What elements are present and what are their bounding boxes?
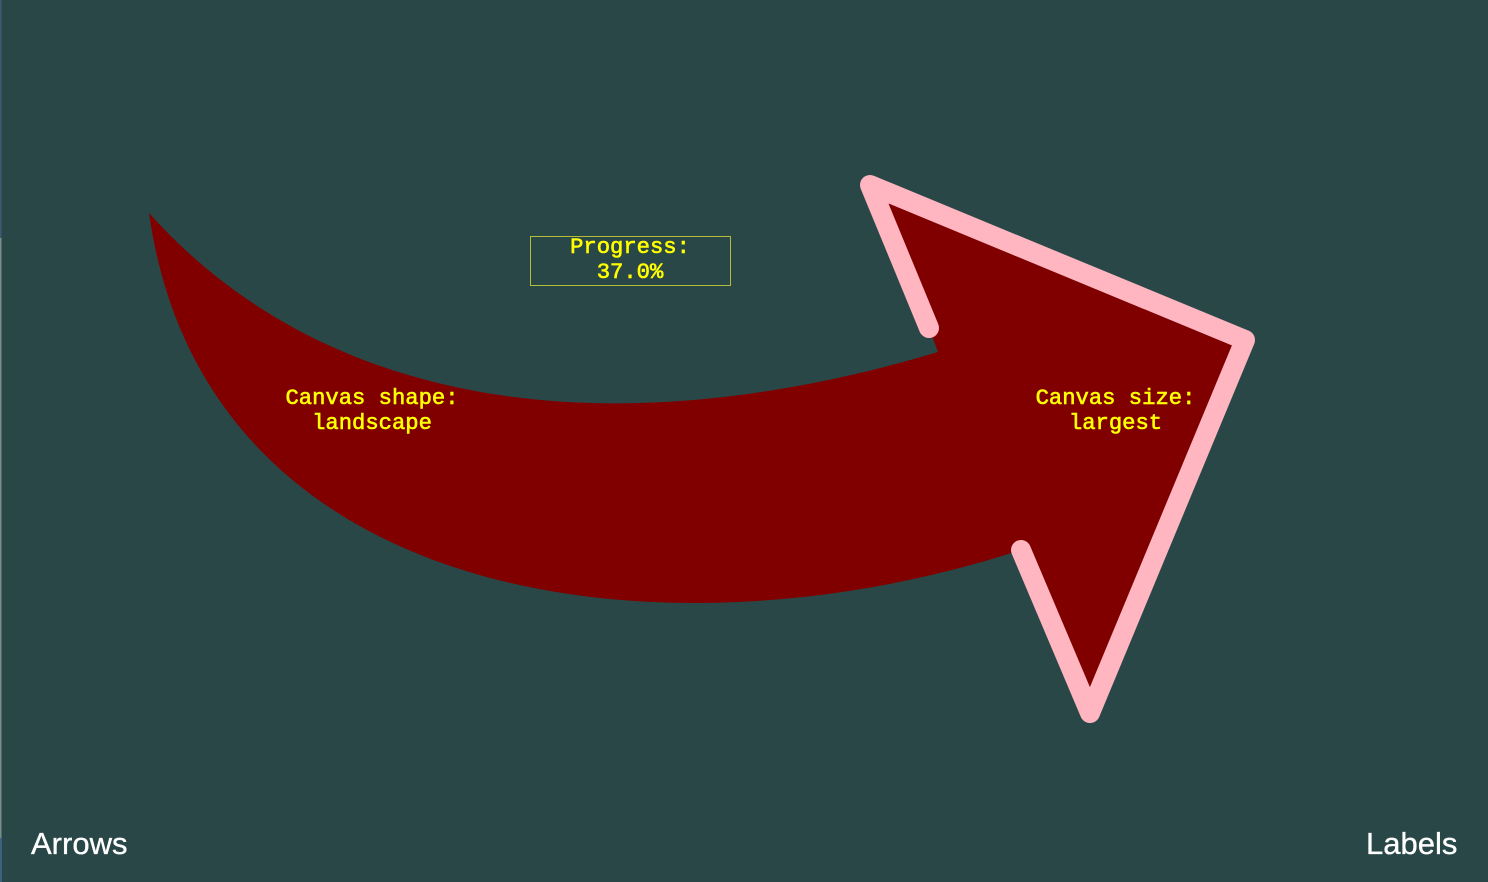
footer right: Labels: Labels	[1366, 826, 1457, 861]
arrow body and head fill	[149, 185, 1245, 713]
arrow head outline	[870, 185, 1245, 713]
progress label box: Progress:	[570, 235, 690, 260]
progress label box: 37.0%	[597, 260, 664, 285]
progress label box	[530, 235, 730, 286]
label: canvas size: largest	[1069, 411, 1162, 436]
label: canvas shape: landscape	[312, 411, 432, 436]
label: canvas shape: Canvas shape:	[285, 386, 459, 411]
curved arrow	[149, 185, 1245, 713]
label: canvas shape	[285, 386, 459, 436]
label: canvas size	[1036, 386, 1195, 436]
label: canvas size: Canvas size:	[1036, 386, 1195, 411]
footer left: Arrows: Arrows	[31, 826, 127, 861]
